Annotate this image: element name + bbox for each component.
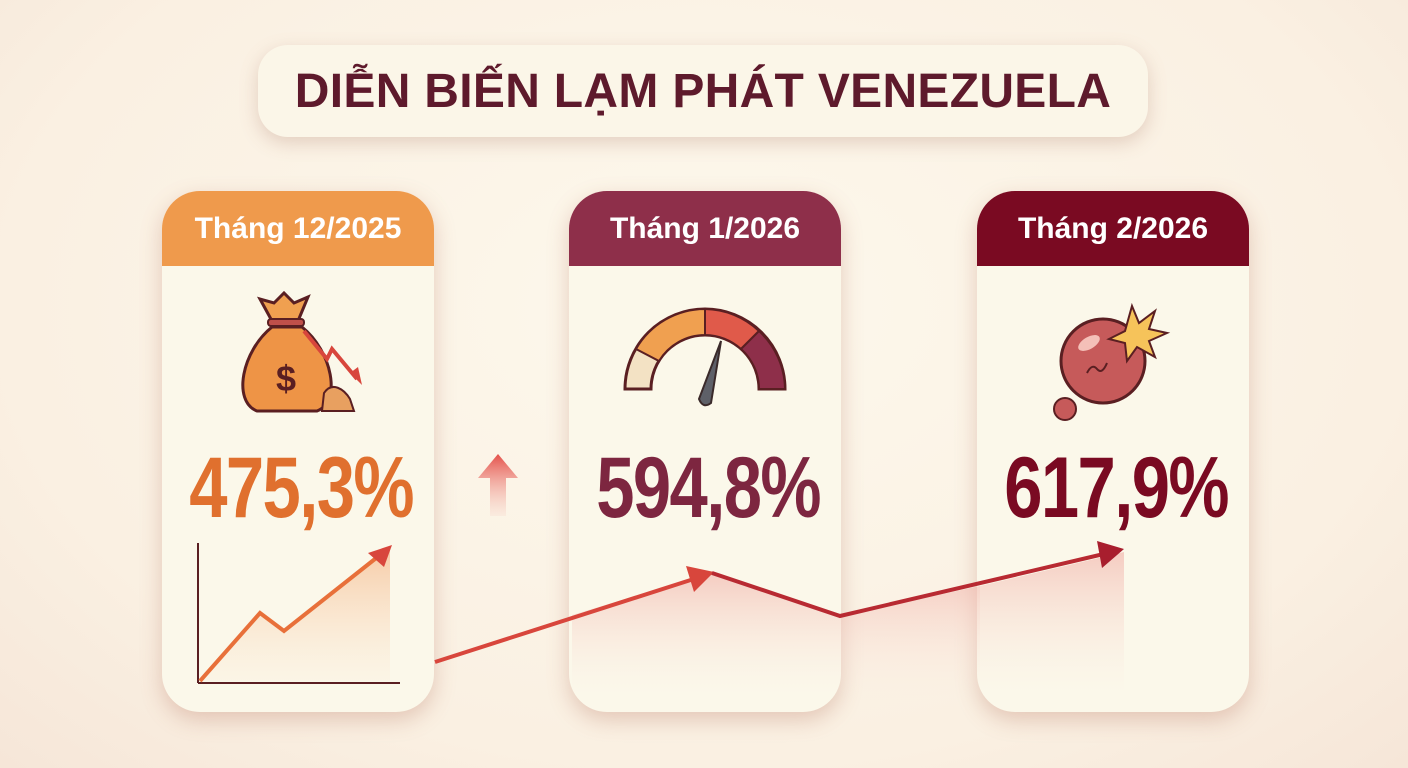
- icon: gauge: [624, 308, 786, 406]
- icon: money bag: [241, 291, 362, 412]
- header 3: [977, 191, 1249, 266]
- value 2: 594,8%: [596, 440, 820, 536]
- title: DIỄN BIẾN LẠM PHÁT VENEZUELA: [295, 64, 1111, 118]
- icon: money bag: $: [276, 358, 296, 399]
- header 2: Tháng 1/2026: [610, 212, 800, 244]
- value 3: 617,9%: [1004, 440, 1228, 536]
- value 1: 475,3%: [189, 440, 413, 536]
- panel: tháng 1/2026: [569, 191, 841, 712]
- header 3: Tháng 2/2026: [1018, 212, 1208, 244]
- panel: tháng 2/2026: [977, 191, 1249, 712]
- icon: bursting bubble: [1053, 303, 1170, 421]
- chart: mini line: [197, 543, 400, 684]
- panel: tháng 12/2025: [162, 191, 434, 712]
- arrow: up between panels: [478, 454, 518, 516]
- header 1: Tháng 12/2025: [195, 212, 401, 244]
- title: [258, 45, 1148, 137]
- header 1: [162, 191, 434, 266]
- header 2: [569, 191, 841, 266]
